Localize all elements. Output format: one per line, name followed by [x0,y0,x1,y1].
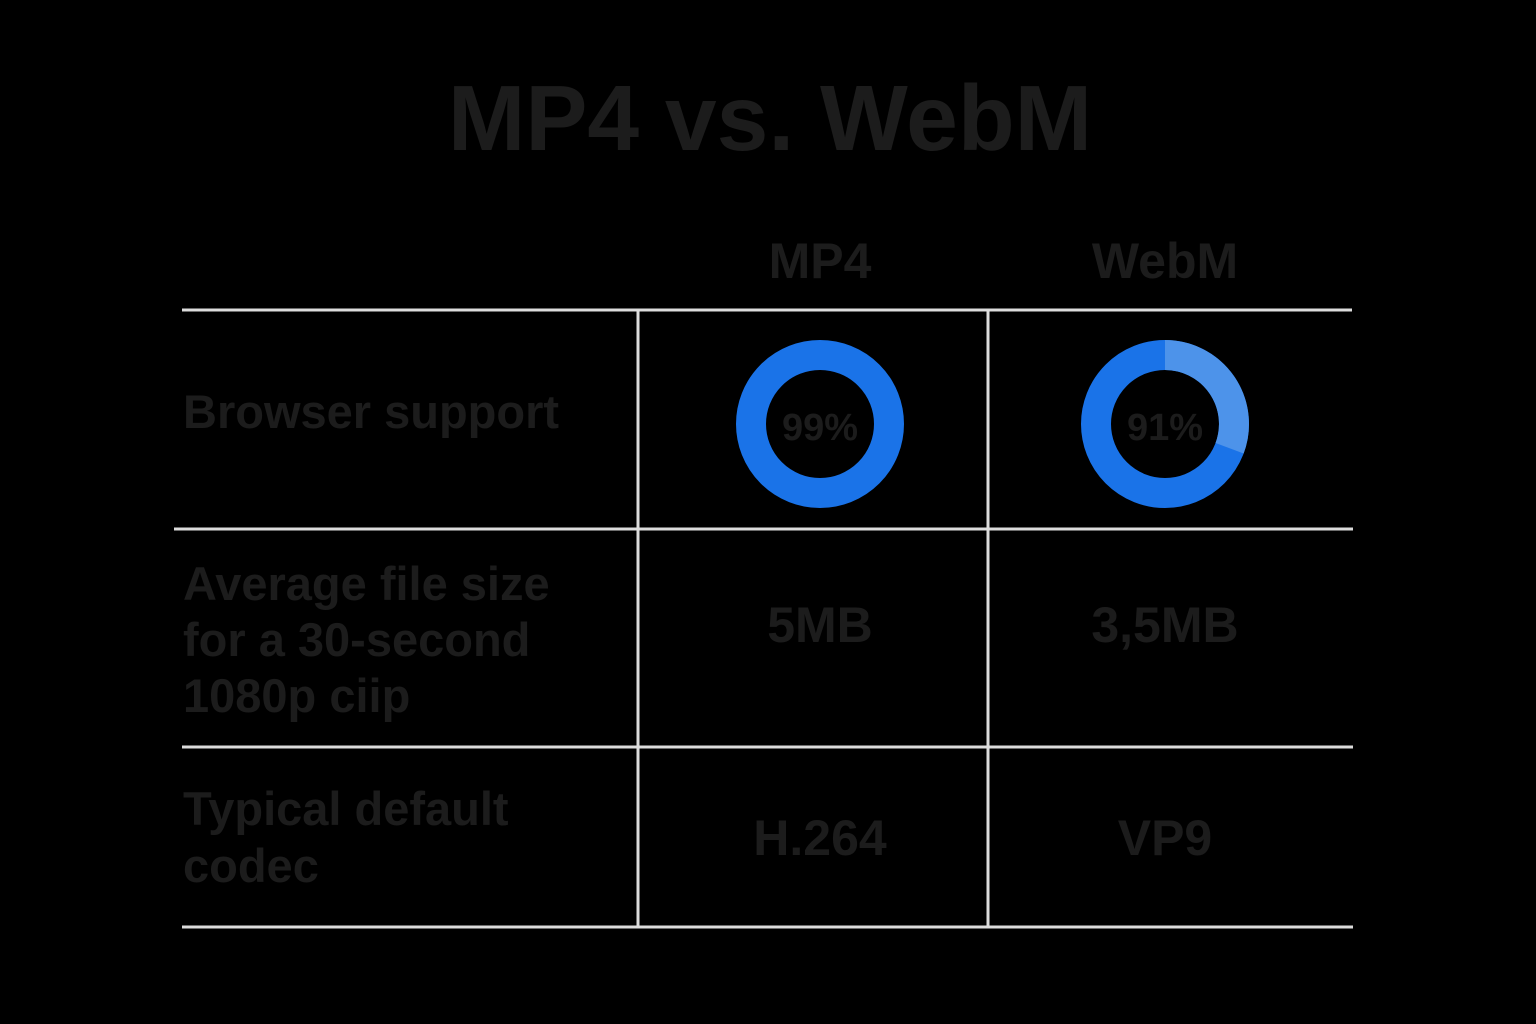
row label: average file size: Average file size [183,557,550,610]
donut: MP4 99%: 99% [782,407,858,449]
donut: MP4 99% [751,355,889,493]
column header: MP4: MP4 [769,233,872,289]
row label: average file size: for a 30-second [183,613,530,666]
row label: codec: codec [183,839,319,892]
row label: browser support: Browser support [183,385,559,438]
title: MP4 vs. WebM [448,66,1092,170]
value: MP4 codec: H.264 [753,810,887,866]
row label: codec: Typical default [183,782,509,835]
column header: WebM: WebM [1092,233,1238,289]
donut: WebM 91% [1096,355,1234,493]
value: MP4 file size: 5MB [767,597,873,653]
donut: WebM 91%: 91% [1127,407,1203,449]
value: WebM codec: VP9 [1118,810,1212,866]
value: WebM file size: 3,5MB [1091,597,1239,653]
row label: average file size: 1080p ciip [183,669,410,722]
table grid [174,310,1353,927]
